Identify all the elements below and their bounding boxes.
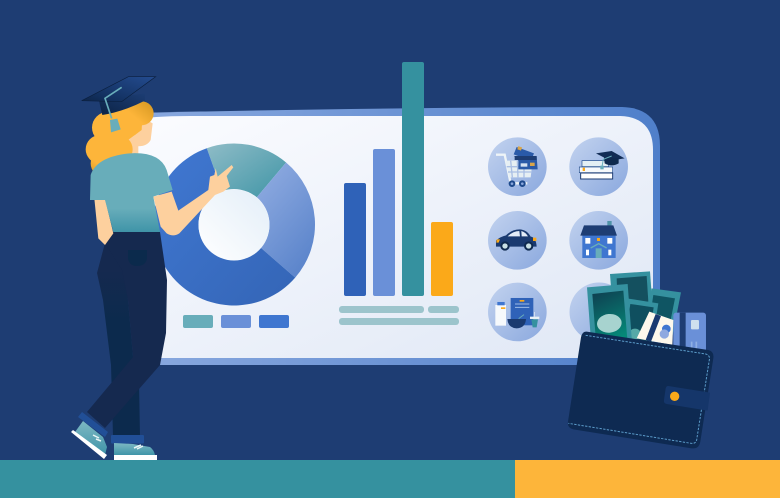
back arm — [94, 198, 113, 245]
credit card in wallet — [673, 313, 706, 356]
panel: dashboard screen — [130, 107, 660, 365]
banknote: middle — [620, 298, 658, 347]
icon: bills, food and drink — [488, 283, 547, 341]
neck — [128, 138, 138, 157]
pointing arm — [153, 165, 233, 235]
icon: shopping cart with credit cards — [488, 137, 547, 196]
face — [125, 115, 153, 146]
back leg — [97, 243, 140, 436]
shirt — [90, 153, 173, 232]
trouser cuff: back — [111, 435, 144, 444]
banknote: front — [587, 284, 632, 350]
donut legend — [183, 315, 289, 328]
pants pocket — [128, 250, 147, 266]
paper card — [637, 312, 673, 345]
banknote: right — [643, 288, 681, 340]
wallet with cash and cards — [568, 271, 713, 448]
wallet body — [568, 332, 713, 448]
shoe: left foot — [71, 421, 107, 459]
icon: house — [569, 211, 628, 270]
icon: books with graduation cap — [569, 137, 628, 196]
graduation cap — [82, 77, 156, 132]
person: student pointing at chart — [71, 77, 233, 460]
icon: car — [488, 211, 547, 270]
shoe: right foot — [114, 443, 157, 460]
ground band — [0, 460, 780, 498]
hair — [86, 100, 154, 178]
bar chart caption lines — [339, 306, 459, 325]
icon: wallet circle — [570, 282, 628, 342]
bar chart — [344, 62, 453, 296]
donut chart — [153, 144, 315, 305]
trouser cuff: front — [78, 412, 108, 437]
front leg and pants — [87, 232, 167, 428]
banknote: back — [610, 271, 652, 305]
